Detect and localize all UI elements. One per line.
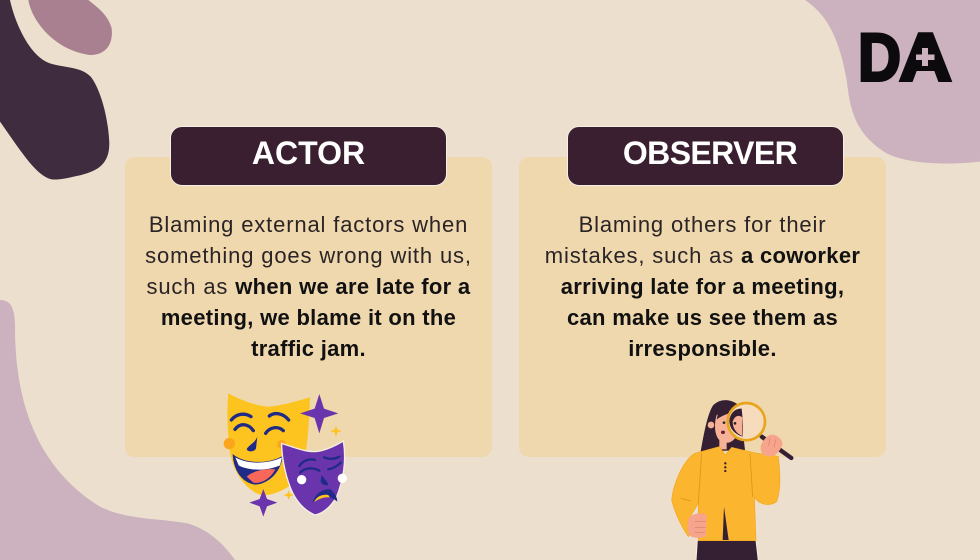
logo: DA plus: D [858,20,901,96]
logo: DA plus [858,20,952,96]
text block: observer description: Blaming others for their [579,212,826,237]
heading: observer: OBSERVER [623,135,797,171]
sad mask [282,441,345,515]
magnifier handle [762,437,791,458]
text block: actor description [145,212,472,361]
lens [728,403,765,440]
text block: actor description: meeting, we blame it on the [161,305,456,330]
text block: actor description: such as when we are late for a [146,274,470,299]
text block: actor description: something goes wrong with us, [145,243,472,268]
text block: actor description: traffic jam. [251,336,366,361]
text block: observer description: can make us see them as [567,305,838,330]
happy mask [227,393,310,496]
blob: dark top left [0,0,109,179]
panel: observer card [519,157,886,457]
right hand [761,435,782,456]
text block: observer description [545,212,860,361]
hair [701,400,745,452]
heading: observer [567,126,844,186]
text block: observer description: mistakes, such as a coworker [545,243,860,268]
face and neck [715,411,740,449]
heading: actor [170,126,447,186]
text block: actor description: Blaming external factors when [149,212,468,237]
heading: actor: ACTOR [252,135,365,171]
text block: observer description: arriving late for a meeting, [561,274,844,299]
logo: DA plus: A [899,20,952,96]
icon: woman with magnifying glass [672,400,791,560]
blob: lilac top right [805,0,980,164]
text block: observer description: irresponsible. [628,336,777,361]
sparkles [300,394,338,433]
skirt [696,540,758,560]
left hand [688,513,707,538]
blob: mauve top left [28,0,112,55]
blouse [672,447,780,541]
blob: lilac bottom left [0,300,235,560]
panel: actor card [125,157,492,457]
icon: theatre masks [224,393,347,517]
